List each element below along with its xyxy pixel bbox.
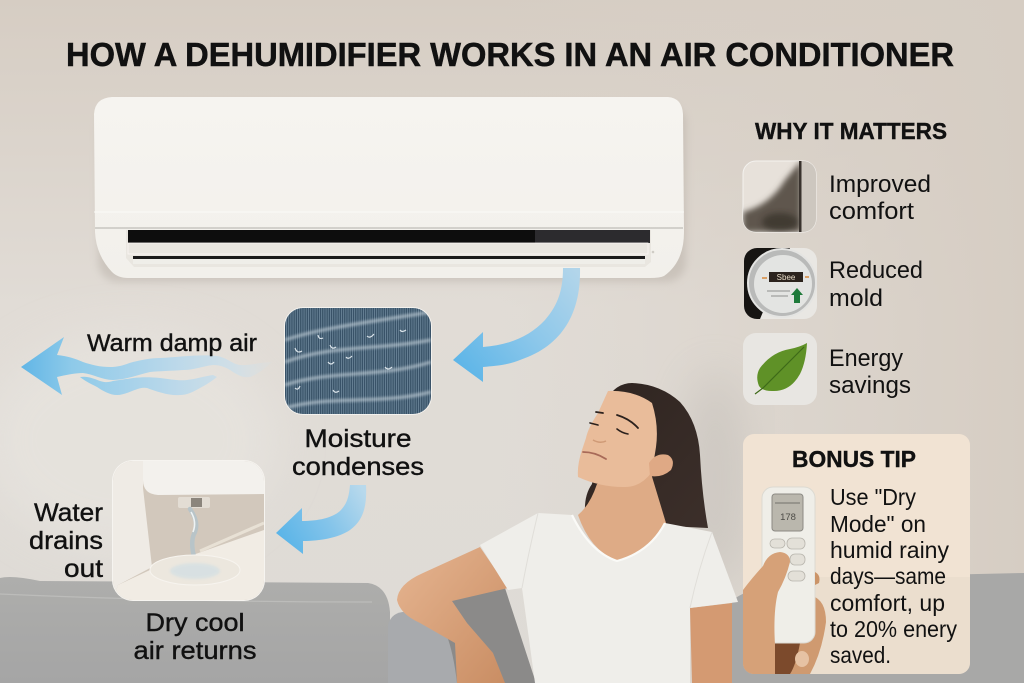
icon: electric meter xyxy=(744,248,817,319)
label: comfort xyxy=(829,198,914,225)
arrow: coil to drain xyxy=(276,485,366,554)
tip text: humid rainy xyxy=(830,537,949,563)
meter reading: Sbee xyxy=(777,273,796,282)
image: wet evaporator coil xyxy=(284,307,432,415)
label: water drains out: drains xyxy=(29,527,103,555)
label: Improved xyxy=(829,171,931,198)
panel: bonus tip xyxy=(743,434,970,674)
item: energy savings xyxy=(743,333,911,405)
icon: green leaf xyxy=(743,333,817,405)
icon: mold corner xyxy=(743,161,816,232)
label: moisture condenses: Moisture xyxy=(304,425,412,453)
tip text xyxy=(830,484,957,668)
nose shading xyxy=(593,440,606,442)
neck and chest xyxy=(578,470,666,561)
face xyxy=(578,391,657,487)
tip text: Mode" on xyxy=(830,511,926,537)
fingers xyxy=(815,572,820,585)
label xyxy=(829,257,923,312)
tip text: Use "Dry xyxy=(830,484,916,510)
remote control xyxy=(762,487,815,643)
arrow: warm damp air xyxy=(21,337,272,395)
label: dry cool air returns xyxy=(134,609,256,665)
water stream xyxy=(190,509,196,557)
tip text: to 20% enery xyxy=(830,616,957,642)
drain nozzle xyxy=(178,497,210,508)
label: water drains out xyxy=(29,499,103,583)
hair xyxy=(585,383,708,528)
ear xyxy=(649,454,673,476)
label: moisture condenses xyxy=(292,425,424,481)
heading: bonus tip: BONUS TIP xyxy=(792,446,916,472)
t-shirt xyxy=(480,513,738,683)
hand holding remote xyxy=(743,487,826,674)
title: HOW A DEHUMIDIFIER WORKS IN AN AIR CONDITIONER xyxy=(66,36,954,73)
drip tray xyxy=(150,555,240,585)
item: reduced mold xyxy=(744,248,923,319)
sofa xyxy=(0,573,1024,683)
woman relaxing xyxy=(397,383,738,683)
arrow: AC to coil xyxy=(453,268,580,382)
label xyxy=(829,345,911,399)
thumb xyxy=(743,552,790,674)
air conditioner unit xyxy=(94,97,686,282)
eyes xyxy=(583,412,638,459)
label: warm damp air: Warm damp air xyxy=(87,330,257,357)
label: dry cool air returns: air returns xyxy=(134,637,256,665)
label: Energy xyxy=(829,345,903,372)
image: water draining xyxy=(112,460,265,601)
tip text: comfort, up xyxy=(830,590,945,616)
label: mold xyxy=(829,285,883,312)
other arm xyxy=(690,603,732,683)
heading: why it matters: WHY IT MATTERS xyxy=(755,118,947,144)
label: water drains out: Water xyxy=(34,499,103,527)
label xyxy=(829,171,931,225)
label: moisture condenses: condenses xyxy=(292,453,424,481)
label: savings xyxy=(829,372,911,399)
arm on sofa xyxy=(397,547,508,683)
remote display: 178 xyxy=(780,512,796,523)
label: water drains out: out xyxy=(64,555,103,583)
item: improved comfort xyxy=(743,161,931,232)
label: Reduced xyxy=(829,257,923,284)
label: dry cool air returns: Dry cool xyxy=(146,609,244,637)
tip text: days—same xyxy=(830,563,946,589)
tip text: saved. xyxy=(830,642,891,668)
power indicator xyxy=(652,251,654,253)
